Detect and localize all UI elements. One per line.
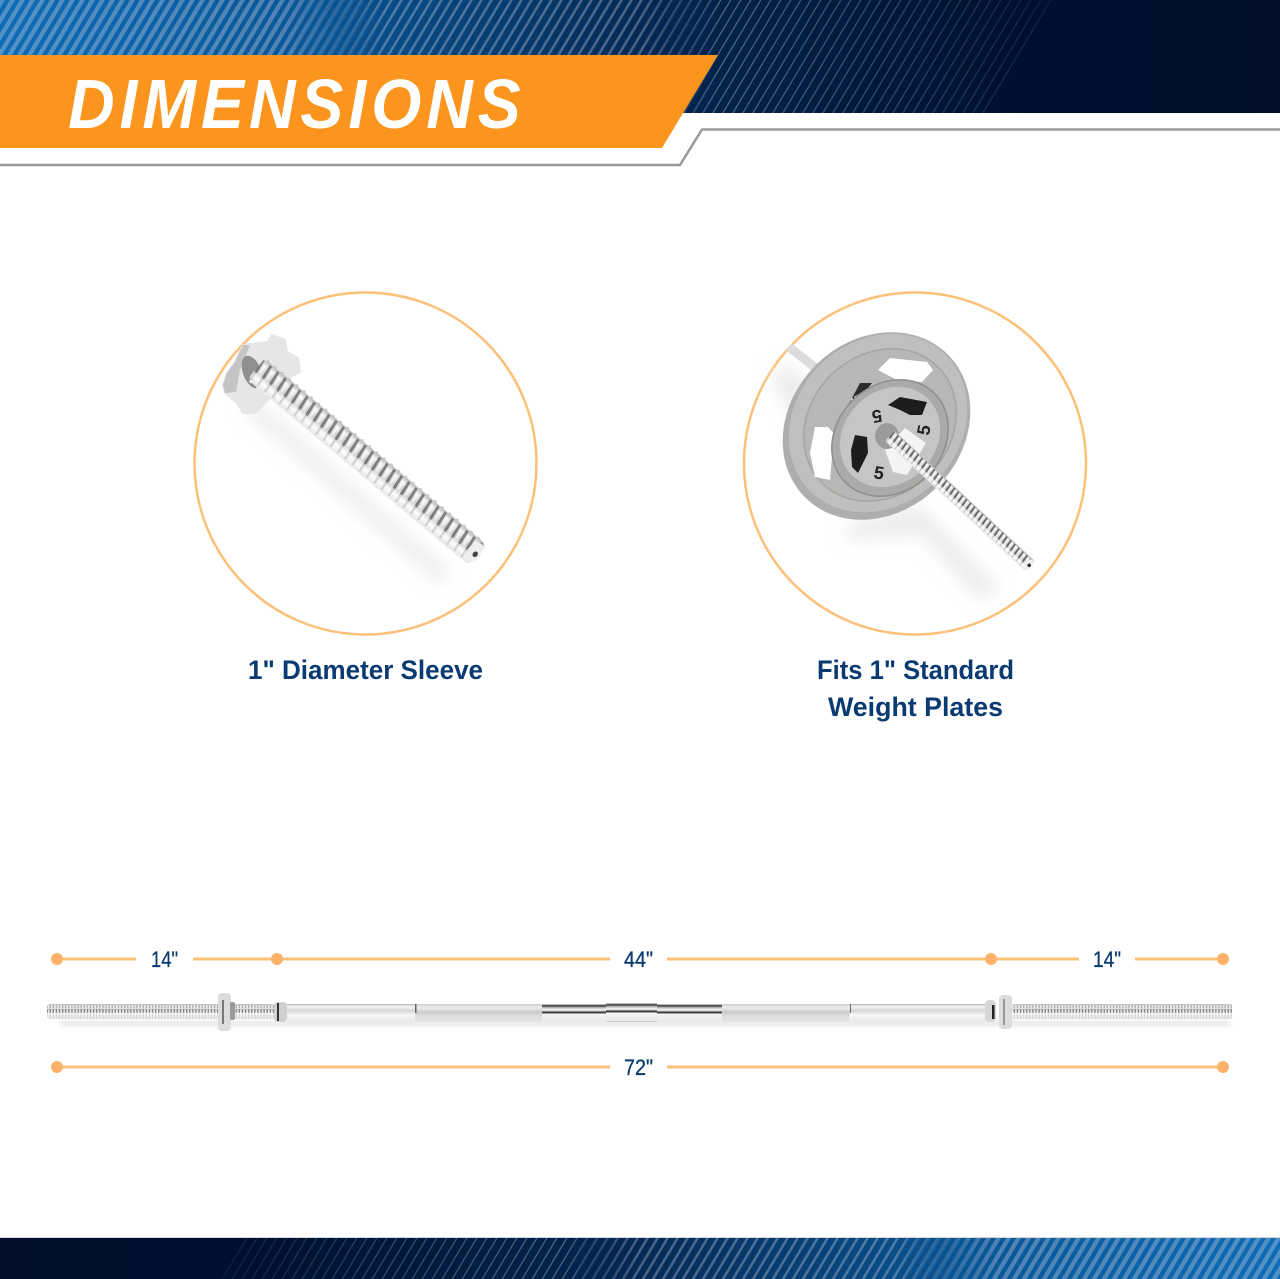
circle outline: [744, 292, 1086, 634]
right grip: [722, 1004, 852, 1022]
icon: bar stub: [789, 347, 826, 376]
icon: collar nut: [223, 335, 300, 413]
panel: sleeve: [194, 292, 536, 634]
caption: sleeve: 1" Diameter Sleeve: [248, 655, 483, 685]
right collar nut: [999, 995, 1012, 1029]
icon: threaded bolt: [247, 358, 489, 567]
center shaft: [542, 1004, 722, 1022]
title: DIMENSIONS: [68, 66, 521, 144]
caption: plates: Fits 1" Standard: [817, 655, 1014, 685]
circle outline: [194, 292, 536, 634]
barbell shadow: [60, 1021, 1230, 1026]
center sleeve: [606, 1003, 657, 1022]
plate shadow: [770, 370, 1000, 600]
right thread: [1012, 1004, 1232, 1019]
bolt shadow: [250, 405, 445, 578]
icon: weight plate: 5: [913, 423, 935, 437]
title banner: [0, 55, 718, 148]
icon: weight plate: 5: [872, 462, 886, 484]
plate stamp: 5: [846, 392, 865, 408]
left sleeve: [287, 1004, 415, 1022]
plate stamps: 5: [870, 405, 884, 427]
footer band: [0, 1237, 1280, 1279]
right sleeve: [851, 1004, 985, 1022]
dimension line: segments: [51, 953, 1229, 965]
dimension labels: 44": [624, 947, 653, 972]
left bar collar: [274, 1002, 287, 1022]
dimension labels: [151, 947, 1121, 972]
barbell: [47, 993, 1232, 1031]
dimension labels: 14": [151, 947, 178, 972]
left grip: [415, 1004, 542, 1022]
header band: [0, 0, 1280, 113]
icon: weight plate: [744, 294, 1009, 558]
icon: threaded bar end: [885, 431, 1036, 572]
panel: weight plate: [744, 292, 1086, 634]
dimension labels: 14": [1093, 947, 1121, 972]
left collar nut: [218, 993, 235, 1031]
right bar collar: [985, 1000, 996, 1022]
left thread: [47, 1004, 275, 1019]
caption: plates: [817, 655, 1014, 722]
header grey outline: [0, 130, 1280, 165]
dimension label: overall: 72": [624, 1055, 653, 1080]
dimension line: overall: [51, 1061, 1229, 1073]
caption: plates: Weight Plates: [828, 692, 1003, 722]
